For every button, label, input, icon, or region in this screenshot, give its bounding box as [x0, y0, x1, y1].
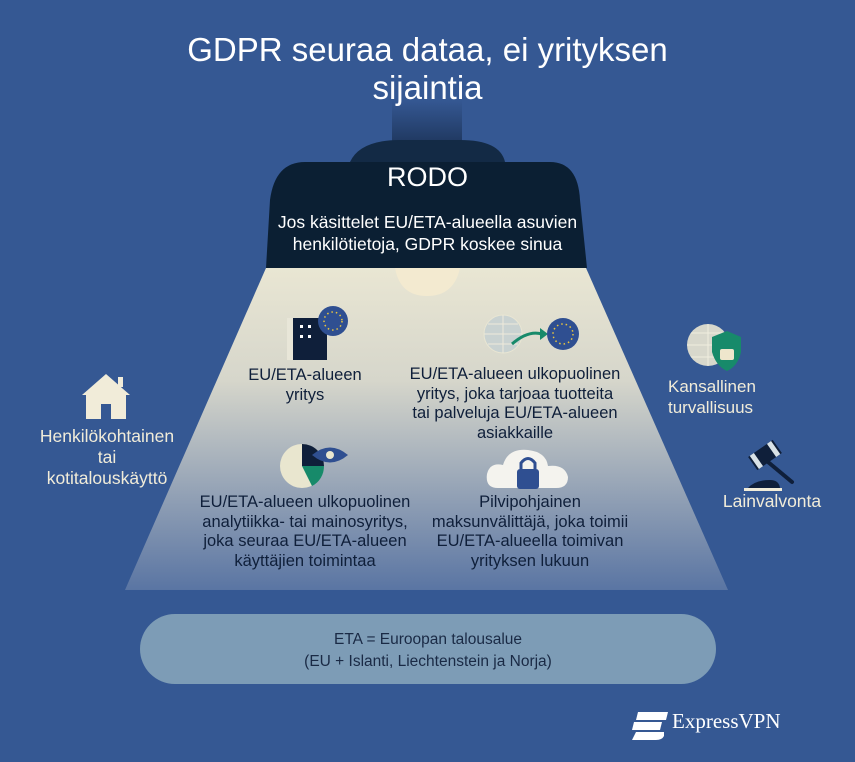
icon: cloud lock: [487, 450, 568, 489]
footnote text: ETA = Euroopan talousalue: [334, 631, 522, 648]
RODO heading: RODO: [387, 162, 468, 192]
text: payment: maksunvälittäjä, joka toimii: [432, 512, 628, 530]
text: household: [40, 426, 174, 488]
logo mark: [632, 712, 668, 740]
text: household: tai: [98, 447, 116, 467]
lamp shade: [266, 140, 587, 296]
light cone: [125, 268, 728, 590]
text: household: kotitalouskäyttö: [47, 468, 167, 488]
text: household: Henkilökohtainen: [40, 426, 174, 446]
footnote text: (EU + Islanti, Liechtenstein ja Norja): [304, 653, 552, 670]
text: analytics: [200, 493, 410, 570]
text: national security: [668, 377, 756, 417]
lamp cord: [392, 100, 462, 150]
text: EU company: EU/ETA-alueen: [248, 366, 362, 384]
text: national security: turvallisuus: [668, 398, 753, 417]
icon: gavel: [744, 440, 792, 491]
text: payment: Pilvipohjainen: [479, 493, 581, 511]
title: GDPR seuraa dataa, ei yrityksen: [187, 31, 668, 68]
lamp text: henkilötietoja, GDPR koskee sinua: [293, 234, 562, 254]
icon: analytics pie eye: [280, 444, 348, 488]
lamp text: Jos käsittelet EU/ETA-alueella asuvien: [278, 212, 577, 232]
title: sijaintia: [372, 69, 483, 106]
text: non-EU company: asiakkaille: [477, 424, 553, 442]
text: non-EU company: EU/ETA-alueen ulkopuolinen: [410, 365, 620, 383]
text: payment: [432, 493, 628, 570]
text: EU company: [248, 366, 362, 404]
text: payment: yrityksen lukuun: [471, 552, 589, 570]
footnote text: [304, 631, 552, 670]
icon: globe to EU: [484, 315, 579, 353]
text: non-EU company: tai palveluja EU/ETA-alueen: [412, 404, 618, 422]
footnote pill: [140, 614, 716, 684]
text: EU company: yritys: [286, 386, 324, 404]
text: non-EU company: [410, 365, 620, 442]
text: analytics: joka seuraa EU/ETA-alueen: [203, 532, 407, 550]
text: analytics: analytiikka- tai mainosyritys,: [202, 512, 408, 530]
lamp text: [278, 212, 577, 254]
text: national security: Kansallinen: [668, 377, 756, 396]
text: law enforcement: Lainvalvonta: [723, 491, 821, 511]
icon: house: [82, 374, 130, 419]
text: analytics: EU/ETA-alueen ulkopuolinen: [200, 493, 410, 511]
icon: EU building: [287, 306, 348, 360]
logo text: ExpressVPN: [672, 709, 780, 733]
text: analytics: käyttäjien toimintaa: [234, 552, 376, 570]
icon: globe with shield: [687, 324, 741, 371]
text: non-EU company: yritys, joka tarjoaa tuotteita: [417, 384, 613, 402]
text: payment: EU/ETA-alueella toimivan: [437, 532, 623, 550]
title: [187, 31, 668, 106]
